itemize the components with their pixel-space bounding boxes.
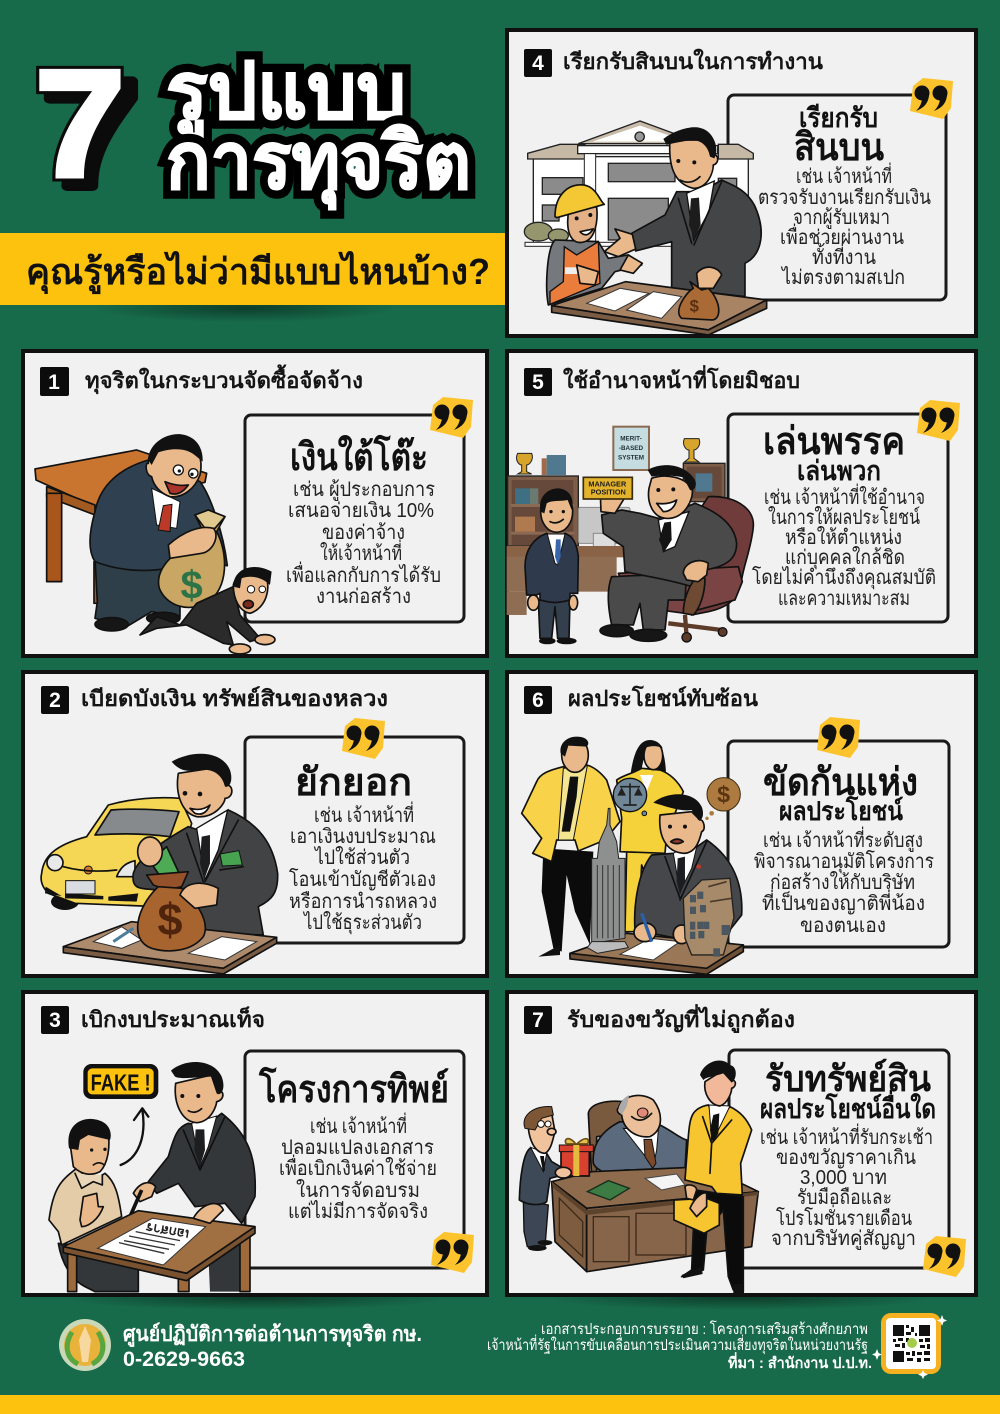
heading: ทุจริตในกระบวนจัดซื้อจัดจ้าง [85, 364, 363, 395]
body text: แต่ไม่มีการจัดจริง [288, 1200, 428, 1223]
box title [760, 1058, 936, 1124]
quote badge [923, 1236, 966, 1277]
panel frame [23, 672, 487, 976]
contact text: ศูนย์ปฏิบัติการต่อต้านการทุจริต กษ. [123, 1322, 422, 1348]
quote badge [431, 1232, 474, 1273]
box title [763, 421, 905, 486]
number badge 5: 5 [532, 371, 544, 394]
illustration: promoting a friend [507, 427, 753, 644]
body text: เช่น เจ้าหน้าที่ [310, 1112, 407, 1138]
body text [289, 801, 437, 935]
number badge 3 [41, 1006, 69, 1034]
heading: เรียกรับสินบนในการทำงาน [563, 48, 823, 74]
picture: merit sign: -BASED [619, 445, 644, 452]
big number 7: 7 [42, 49, 140, 219]
body text: เช่น เจ้าหน้าที่ [796, 162, 892, 188]
body text: เสนอจ่ายเงิน 10% [288, 500, 434, 522]
speech box [245, 737, 464, 943]
speech box [245, 1051, 464, 1268]
number badge 6: 6 [532, 689, 544, 712]
body text: เช่น เจ้าหน้าที่ระดับสูง [763, 826, 923, 853]
heading: ใช้อำนาจหน้าที่โดยมิชอบ [563, 364, 800, 393]
body text: 3,000 บาท [800, 1167, 887, 1189]
body text: ไปใช้ส่วนตัว [313, 846, 410, 869]
speech box [729, 1050, 949, 1268]
big number 7: 7 [35, 39, 125, 209]
body text: เช่น ผู้ประกอบการ [293, 479, 435, 502]
box title: เรียกรับ [799, 103, 878, 133]
quote badge [342, 718, 385, 759]
body text: โอนเข้าบัญชีตัวเอง [289, 868, 436, 891]
banner: subtitle [0, 233, 505, 305]
body text: งานก่อสร้าง [316, 586, 411, 608]
title line 2: การทุจริต [166, 117, 471, 210]
header: title block [35, 39, 471, 219]
box title: เงินใต้โต๊ะ [290, 434, 428, 479]
body text: ในการจัดอบรม [296, 1179, 420, 1202]
body text: ให้เจ้าหน้าที่ [320, 539, 402, 565]
box title: รับทรัพย์สิน [765, 1058, 931, 1099]
body text: หรือการนำรถหลวง [289, 891, 437, 913]
number badge 1: 1 [48, 371, 60, 394]
panel frame [507, 672, 976, 976]
number badge 6 [524, 686, 552, 714]
quote badge [817, 717, 860, 758]
body text: ตรวจรับงานเรียกรับเงิน [758, 187, 931, 209]
body text [752, 483, 936, 610]
illustration: officials and buildings [522, 737, 743, 974]
title line 2: การทุจริต [166, 117, 471, 210]
panel: 2 embezzlement [23, 672, 487, 976]
bottom bar [0, 1395, 1000, 1414]
body text [279, 1112, 437, 1223]
box title: สินบน [794, 127, 884, 169]
number badge 3: 3 [49, 1009, 61, 1032]
source text [487, 1320, 872, 1372]
panel: 1 procurement corruption [23, 351, 487, 656]
illustration: forged document [49, 1062, 255, 1292]
body text: เอาเงินงบประมาณ [290, 826, 436, 848]
body text: โปรโมชั่นรายเดือน [776, 1204, 912, 1230]
body text [286, 479, 441, 608]
illustration: official, car and money bag [41, 754, 278, 974]
body text: ของตนเอง [800, 915, 886, 937]
body text: ไม่ตรงตามสเปก [780, 266, 905, 289]
picture: merit sign: SYSTEM [618, 454, 644, 461]
banner: subtitle: คุณรู้หรือไม่ว่ามีแบบไหนบ้าง? [26, 250, 490, 295]
body text: หรือให้ตำแหน่ง [785, 526, 902, 549]
quote badge [910, 78, 953, 119]
illustration: promoting a friend: MANAGER [588, 480, 627, 489]
illustration: official and contractor [524, 121, 767, 335]
number badge 7 [524, 1006, 552, 1034]
body text [760, 1123, 933, 1251]
box title: เล่นพวก [797, 456, 881, 486]
illustration: gift to boss [519, 1061, 758, 1295]
body text: ก่อสร้างให้กับบริษัท [770, 871, 915, 894]
number badge 2: 2 [49, 689, 61, 712]
panel: 4 bribery [507, 30, 976, 336]
panel frame [23, 351, 487, 656]
box title [794, 103, 884, 169]
box title: โครงการทิพย์ [258, 1066, 449, 1111]
panel: 7 improper gifts [507, 992, 976, 1295]
source text: ที่มา : สำนักงาน ป.ป.ท. [728, 1352, 872, 1372]
box title: ขัดกันแห่ง [763, 762, 918, 804]
body text: ในการให้ผลประโยชน์ [768, 506, 920, 529]
body text: จากผู้รับเหมา [793, 207, 890, 230]
body text: ทั้งที่งาน [812, 243, 876, 269]
body text: ไปใช้ธุระส่วนตัว [302, 911, 422, 935]
title line 1: รูปแบบ [166, 47, 406, 140]
number badge 5 [524, 368, 552, 396]
contact text [123, 1322, 422, 1371]
illustration: official, car and money bag: $ [157, 894, 183, 945]
heading: ผลประโยชน์ทับซ้อน [568, 685, 758, 711]
quote badge [430, 397, 473, 438]
speech box [728, 95, 946, 300]
sign: fake: FAKE ! [91, 1070, 151, 1096]
body text: เพื่อแลกกับการได้รับ [286, 561, 441, 587]
body text: ที่เป็นของญาติพี่น้อง [762, 889, 925, 915]
box title: ผลประโยชน์อื่นใด [760, 1089, 936, 1124]
body text: พิจารณาอนุมัติโครงการ [754, 850, 934, 874]
contact text: 0-2629-9663 [123, 1348, 245, 1371]
footer [59, 1313, 947, 1379]
panel frame [23, 992, 487, 1295]
panel: 5 abuse of power [507, 351, 976, 656]
panel: 6 conflict of interest [507, 672, 976, 976]
heading: รับของขวัญที่ไม่ถูกต้อง [567, 1003, 795, 1034]
heading: เบิกงบประมาณเท็จ [81, 1005, 265, 1032]
arrow [121, 1108, 148, 1165]
illustration: bribe under the table [35, 434, 275, 654]
number badge 2 [41, 686, 69, 714]
heading: เบียดบังเงิน ทรัพย์สินของหลวง [81, 686, 388, 711]
body text: เช่น เจ้าหน้าที่ [314, 801, 414, 827]
QR code [872, 1313, 947, 1379]
body text: เพื่อช่วยผ่านงาน [780, 223, 904, 249]
picture: merit sign: MERIT- [620, 436, 642, 443]
body text: ปลอมแปลงเอกสาร [281, 1137, 434, 1159]
title line 1: รูปแบบ [166, 47, 406, 140]
speech box [245, 415, 464, 622]
number badge 7: 7 [532, 1009, 544, 1032]
body text: เพื่อเบิกเงินค่าใช้จ่าย [279, 1154, 437, 1180]
source text: เจ้าหน้าที่รัฐในการขับเคลื่อนการประเมินความเสี่ยงทุจริตในหน่วยงานรัฐ [487, 1334, 868, 1355]
illustration: officials and buildings: $ [717, 781, 730, 807]
body text: แก่บุคคลใกล้ชิด [785, 546, 905, 570]
picture: merit sign [613, 427, 649, 470]
number badge 4: 4 [532, 52, 544, 75]
body text: ของขวัญราคาเกิน [776, 1147, 916, 1169]
body text: รับมือถือและ [797, 1187, 892, 1209]
box title [763, 762, 918, 826]
illustration: official and contractor: $ [690, 297, 700, 316]
number badge 1 [40, 367, 69, 396]
sign: fake [83, 1064, 158, 1099]
number badge 4 [524, 49, 552, 77]
panel frame [507, 351, 976, 656]
quote badge [917, 400, 960, 441]
speech box [728, 741, 949, 947]
body text [758, 162, 931, 289]
box title: เล่นพรรค [763, 421, 905, 463]
illustration: forged document: เอกสาร [144, 1220, 190, 1242]
box title: ผลประโยชน์ [779, 795, 903, 826]
speech box [728, 414, 948, 622]
illustration: promoting a friend: POSITION [591, 488, 626, 497]
big number 7: 7 [35, 39, 125, 209]
source text: เอกสารประกอบการบรรยาย : โครงการเสริมสร้างศักยภาพ [541, 1320, 868, 1338]
panel: 3 false budget claims [23, 992, 487, 1295]
box title: ยักยอก [295, 762, 412, 804]
body text: ของค่าจ้าง [322, 522, 405, 544]
illustration: bribe under the table: $ [181, 563, 203, 607]
panel frame [507, 30, 976, 336]
body text [754, 826, 934, 937]
body text: โดยไม่คำนึงถึงคุณสมบัติ [752, 566, 936, 590]
body text: และความเหมาะสม [778, 588, 910, 610]
body text: จากบริษัทคู่สัญญา [771, 1228, 916, 1251]
icon: agency seal [59, 1319, 111, 1371]
body text: เช่น เจ้าหน้าที่รับกระเช้า [760, 1123, 933, 1149]
body text: เช่น เจ้าหน้าที่ใช้อำนาจ [764, 483, 925, 509]
panel frame [507, 992, 976, 1295]
